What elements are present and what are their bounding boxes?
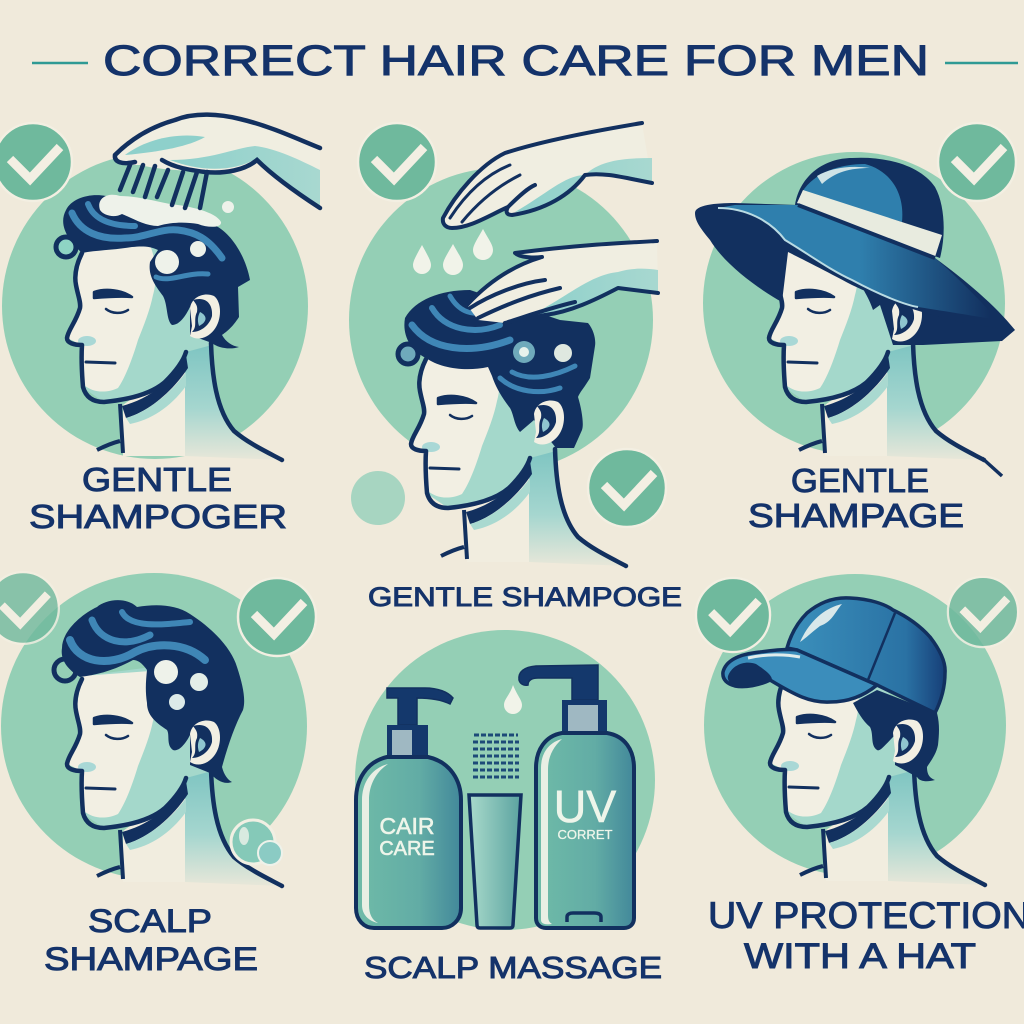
label: SHAMPAGE — [44, 941, 258, 977]
ear — [534, 400, 564, 444]
check badge left — [0, 572, 59, 644]
label: SHAMPOGER — [29, 498, 287, 535]
label — [29, 461, 287, 535]
droplet — [504, 685, 522, 714]
check badge right — [948, 577, 1018, 647]
wide brim hat — [695, 158, 1015, 330]
right bottle — [519, 665, 634, 928]
check badge — [0, 123, 72, 201]
panel: scalp care, bottom left — [0, 572, 316, 977]
panel: sun hat, top right — [695, 123, 1016, 534]
title: CORRECT HAIR CARE FOR MEN — [103, 37, 929, 85]
hair — [398, 290, 595, 448]
green circle backdrop — [704, 574, 1006, 876]
left bottle: CAIR — [380, 813, 434, 839]
label — [708, 895, 1024, 976]
panel: cap, bottom right — [696, 574, 1024, 976]
faded circle — [351, 471, 405, 525]
right bottle: CORRET — [558, 827, 613, 842]
left bottle — [356, 688, 461, 928]
label: UV PROTECTION — [708, 895, 1024, 936]
label — [748, 462, 964, 534]
hand with fingers — [115, 115, 320, 208]
check badge left — [696, 578, 770, 652]
panel: products, bottom centre — [355, 630, 662, 985]
check badge right — [238, 578, 316, 656]
check badge lower — [588, 449, 666, 527]
ear — [190, 720, 220, 764]
label: SCALP — [88, 903, 212, 939]
right bottle: UV — [554, 781, 616, 832]
ear — [893, 720, 923, 763]
ear — [892, 298, 922, 341]
label: GENTLE — [82, 461, 232, 498]
water drops — [413, 229, 493, 275]
check badge top — [358, 123, 436, 201]
neck extension — [982, 458, 1002, 476]
label: WITH A HAT — [744, 937, 976, 976]
green circle backdrop — [349, 168, 653, 472]
man profile — [67, 240, 282, 460]
green circle backdrop — [2, 153, 308, 459]
check badge — [938, 123, 1016, 201]
hair with foam — [56, 195, 250, 348]
hair and back of brim — [860, 280, 1015, 345]
man profile — [67, 666, 282, 886]
left bottle: CARE — [379, 838, 435, 860]
hair under cap — [853, 690, 939, 781]
centre tube — [469, 735, 521, 928]
label: SHAMPAGE — [748, 497, 964, 534]
hair — [54, 600, 244, 783]
panel: rinsing, top centre — [349, 123, 682, 612]
green circle backdrop — [703, 152, 1005, 454]
man profile — [769, 240, 984, 460]
label — [44, 903, 258, 977]
baseball cap — [723, 598, 945, 713]
green circle backdrop — [355, 630, 655, 930]
man profile — [411, 346, 626, 566]
foam bubbles — [231, 820, 282, 865]
label: GENTLE — [791, 462, 929, 499]
label: GENTLE SHAMPOGE — [368, 582, 682, 612]
man profile — [770, 665, 985, 885]
lower hand — [467, 241, 658, 323]
ear — [190, 294, 220, 338]
upper hand — [443, 123, 652, 228]
label: SCALP MASSAGE — [364, 950, 662, 985]
panel: gentle shampooing, top left — [0, 115, 320, 535]
green circle backdrop — [1, 573, 307, 879]
